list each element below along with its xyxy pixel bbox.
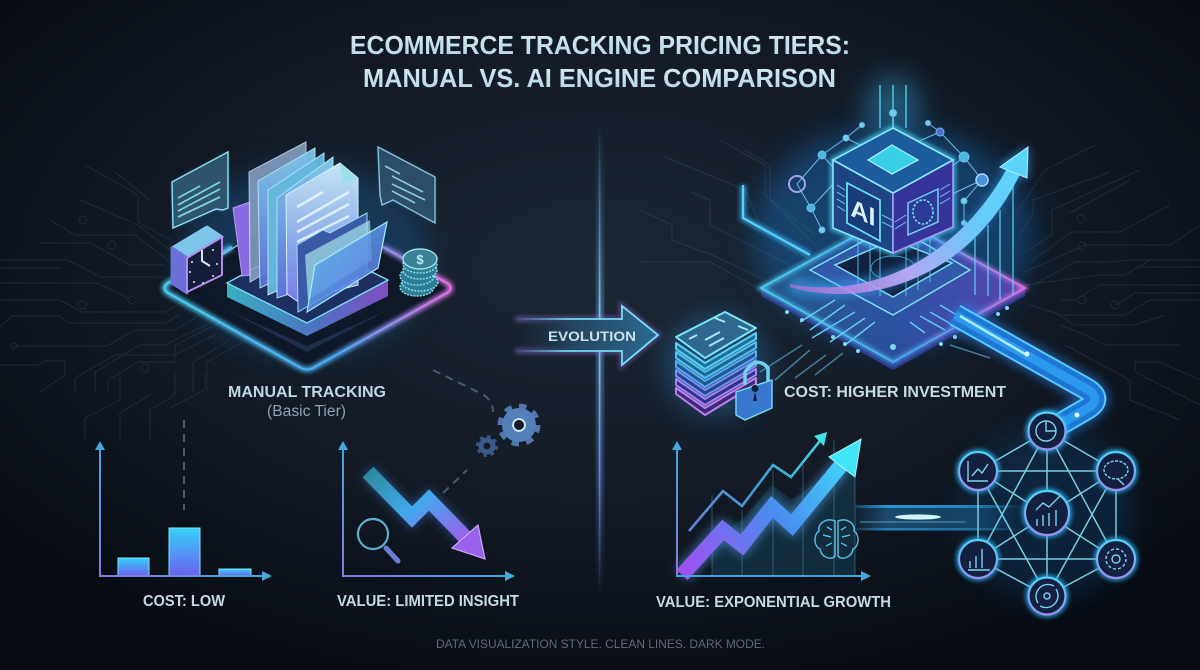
node glow <box>959 412 1135 614</box>
label: value limited insight: VALUE: LIMITED INSIGHT <box>337 593 520 610</box>
vertical light beams <box>880 85 906 128</box>
center divider <box>597 125 603 595</box>
arrow: evolution: EVOLUTION <box>548 329 636 344</box>
icon: coin stack: $ <box>416 252 424 267</box>
growth bars behind curve <box>975 185 1013 300</box>
icon: folder <box>297 213 387 312</box>
network nodes <box>959 412 1135 614</box>
icon: coin stack <box>400 249 438 296</box>
label: value exponential growth: VALUE: EXPONENTIAL GROWTH <box>656 594 891 611</box>
icon: brain <box>815 520 858 558</box>
title <box>350 32 850 93</box>
icon: AI cube <box>833 128 953 253</box>
label: manual tracking: MANUAL TRACKING <box>228 384 386 401</box>
horizontal beam to network <box>855 505 1022 531</box>
icon: right chat window <box>378 147 435 223</box>
network links <box>978 431 1116 596</box>
panel: AI engine illustration <box>743 75 1033 380</box>
data beam <box>955 315 1095 430</box>
panel: manual tracking illustration <box>164 142 450 370</box>
arrow: evolution <box>515 306 658 365</box>
circuit traces: left <box>0 165 250 440</box>
base block <box>227 240 388 352</box>
chart: value limited insight <box>338 441 515 581</box>
label: manual tracking <box>228 384 386 420</box>
node glyphs <box>968 421 1128 608</box>
icon: gears <box>478 406 538 456</box>
label: cost low: COST: LOW <box>143 593 225 610</box>
arrow: rising curve <box>790 147 1028 294</box>
network diagram <box>959 412 1135 614</box>
icon: AI cube: AI <box>851 193 875 232</box>
label: manual tracking: (Basic Tier) <box>267 403 346 420</box>
title: ECOMMERCE TRACKING PRICING TIERS: <box>350 32 850 60</box>
icon: left chat window <box>172 152 228 228</box>
icon: document stack <box>249 142 358 301</box>
chip pins <box>760 300 990 380</box>
bar chart: cost low <box>95 441 272 581</box>
circuit traces: around chip <box>640 140 815 295</box>
network around cube <box>789 110 988 233</box>
title: MANUAL VS. AI ENGINE COMPARISON <box>363 65 836 93</box>
icon: clock <box>172 227 238 293</box>
glowing trace <box>743 185 810 255</box>
circuit traces: right <box>1015 145 1200 420</box>
footer note: DATA VISUALIZATION STYLE. CLEAN LINES. DARK MODE. <box>436 639 765 651</box>
chart: exponential growth <box>672 432 871 581</box>
label: cost higher investment: COST: HIGHER INVESTMENT <box>784 384 1007 401</box>
platform outline <box>164 205 450 370</box>
dashed connector to gears <box>184 370 493 510</box>
icon: card stack with lock <box>666 312 772 420</box>
icon: purple folder behind <box>233 202 250 276</box>
chip platform <box>761 215 1025 370</box>
